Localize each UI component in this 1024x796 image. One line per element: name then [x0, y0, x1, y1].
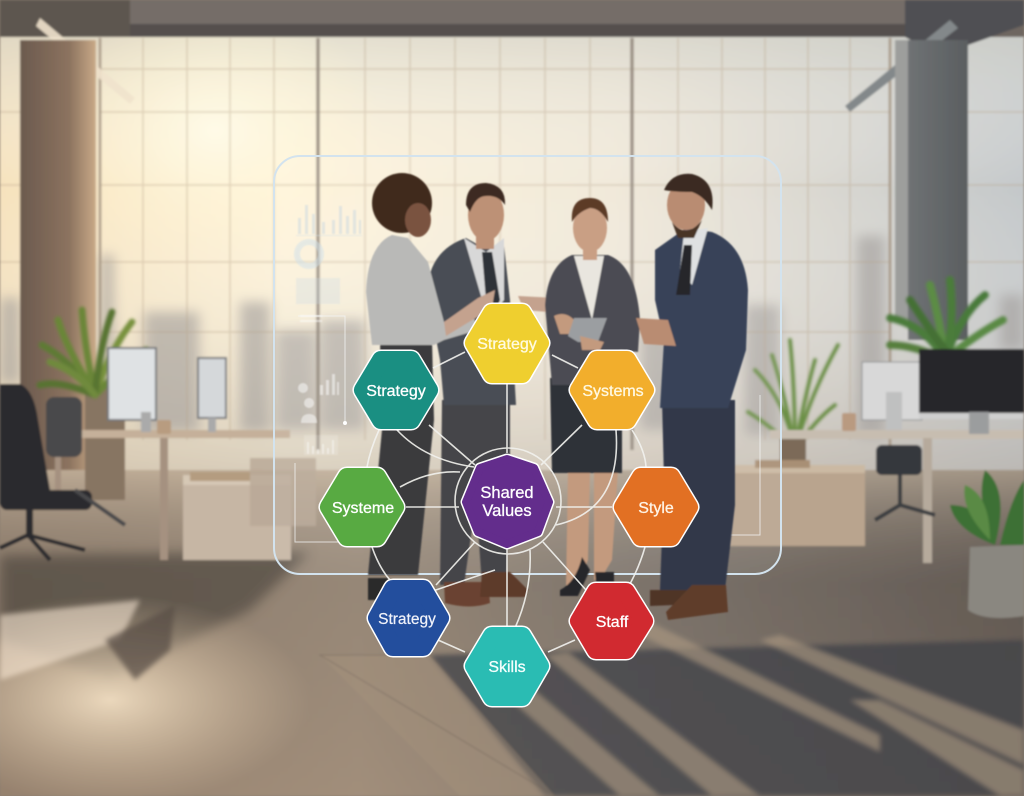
faint data charts on glass [296, 205, 362, 455]
hexagon: Systeme: Systeme [332, 500, 394, 517]
hexagon: Systems [579, 360, 645, 420]
hexagon: Strategy blue: Strategy [378, 611, 436, 628]
office chair [0, 384, 125, 560]
columns [20, 40, 968, 520]
right workstation [726, 280, 1024, 618]
panel: glass overlay frame [274, 156, 781, 574]
hexagon: Staff [579, 592, 644, 650]
hexagon: Strategy yellow: Strategy [477, 336, 537, 353]
right plants [748, 280, 1003, 466]
hexagon: Style [623, 477, 689, 537]
connector network [367, 352, 646, 652]
left plant [40, 310, 146, 500]
thin overlay lines [295, 292, 760, 542]
hexagon: Strategy teal [363, 360, 429, 420]
hexagon: Shared Values: Values [482, 502, 532, 520]
overlay node dots [343, 407, 716, 425]
bar chart icon [296, 205, 362, 236]
small chart box [304, 435, 338, 455]
hexagon: Systeme [329, 477, 395, 537]
window wall [0, 0, 1024, 476]
people [366, 173, 748, 620]
donut chart icon [297, 242, 321, 266]
text lines [300, 315, 322, 322]
person: woman with curly hair [366, 173, 495, 600]
person: woman in skirt suit [545, 198, 640, 596]
hexagon: Style: Style [638, 500, 674, 517]
person icon [301, 398, 317, 423]
hexagon: Skills: Skills [488, 659, 526, 676]
potted plant [950, 470, 1024, 618]
hexagon: Shared Values [466, 459, 549, 544]
hexagon: Shared Values: Shared [480, 484, 534, 502]
hexagon: Skills [474, 636, 540, 697]
small bar icon [298, 374, 339, 395]
hexagon: Strategy blue [377, 589, 440, 647]
hexagon: Strategy teal: Strategy [366, 383, 426, 400]
floor [0, 470, 1024, 796]
hexagon: Staff: Staff [596, 614, 629, 631]
person: man in navy suit [636, 174, 748, 620]
hexagon: Systems: Systems [582, 383, 644, 400]
ceiling [0, 0, 1024, 112]
pie chart icon [296, 278, 340, 304]
left workstation [0, 310, 316, 560]
person: man with striped tie [427, 183, 556, 606]
hexagon: Strategy yellow [474, 313, 540, 374]
